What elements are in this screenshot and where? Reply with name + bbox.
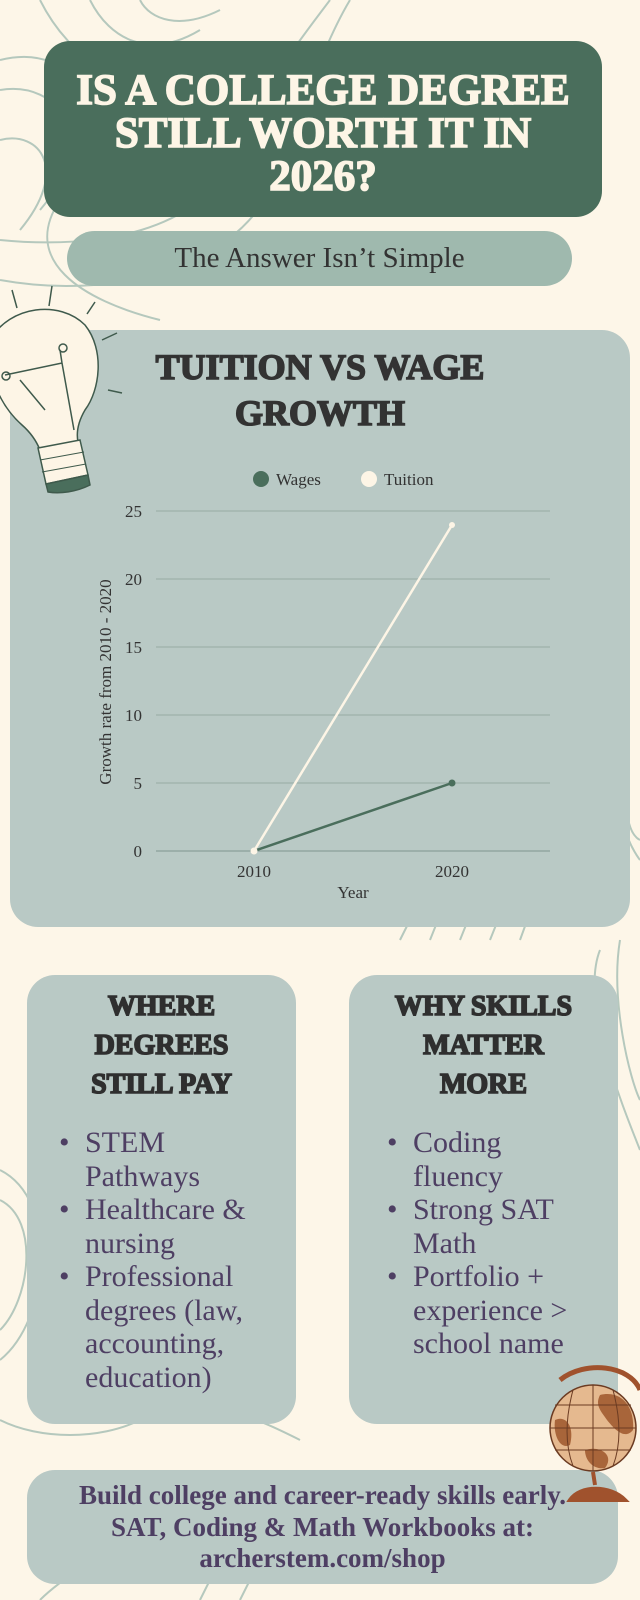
callout: shop: SAT, Coding & Math Workbooks at:	[111, 1512, 534, 1542]
bullet list: Professional	[85, 1260, 233, 1293]
bullet list: STEM	[85, 1126, 165, 1159]
bullet list	[388, 1126, 567, 1360]
line chart: Growth rate from 2010 - 2020	[96, 579, 115, 785]
icon: lightbulb	[0, 286, 122, 494]
chart heading: TUITION VS WAGE	[156, 347, 484, 387]
heading: WHERE	[108, 991, 215, 1022]
y tick labels: 10	[125, 706, 142, 725]
callout: shop: Build college and career-ready skills early.	[79, 1480, 566, 1510]
panel: why skills matter more	[349, 975, 618, 1424]
callout: shop	[27, 1470, 618, 1584]
tuition line	[254, 522, 455, 851]
bullet list: fluency	[413, 1160, 503, 1192]
title	[44, 41, 602, 217]
legend: Tuition	[384, 470, 434, 489]
panel: chart	[10, 330, 630, 927]
y tick labels: 20	[125, 570, 142, 589]
subtitle pill	[67, 231, 572, 286]
title: STILL WORTH IT IN	[115, 110, 531, 157]
bullet list: accounting,	[85, 1327, 224, 1360]
heading	[91, 991, 232, 1100]
bullet list: school name	[413, 1327, 564, 1360]
callout: shop: archerstem.com/shop	[199, 1543, 446, 1573]
y tick labels: 5	[134, 774, 142, 793]
line chart	[96, 470, 550, 902]
heading: STILL PAY	[91, 1069, 232, 1100]
bullet list: nursing	[85, 1226, 175, 1260]
heading: MORE	[440, 1069, 527, 1100]
bullet list: Strong SAT	[413, 1193, 554, 1226]
bullet list: Coding	[413, 1126, 501, 1159]
x tick labels: 2020	[435, 862, 469, 881]
legend	[253, 470, 434, 489]
y tick labels	[125, 502, 142, 861]
subtitle pill: The Answer Isn’t Simple	[174, 242, 465, 274]
y tick labels: 25	[125, 502, 142, 521]
y tick labels: 0	[134, 842, 142, 861]
legend: Wages	[276, 470, 321, 489]
bullet list	[60, 1126, 246, 1394]
bullet list: Pathways	[85, 1160, 200, 1192]
heading: WHY SKILLS	[395, 991, 572, 1022]
bullet list: degrees (law,	[85, 1294, 243, 1326]
chart heading	[155, 347, 484, 433]
title: 2026?	[269, 153, 377, 200]
x tick labels	[237, 862, 469, 881]
heading	[394, 991, 572, 1100]
axis titles: Year	[337, 883, 369, 902]
bullet list: Math	[413, 1226, 476, 1260]
x tick labels: 2010	[237, 862, 271, 881]
bullet list: Portfolio +	[413, 1260, 544, 1293]
bullet list: Healthcare &	[85, 1193, 246, 1226]
wages line	[250, 780, 456, 854]
panel: where degrees still pay	[27, 975, 296, 1424]
heading: MATTER	[423, 1030, 544, 1061]
y tick labels: 15	[125, 638, 142, 657]
chart heading: GROWTH	[235, 393, 405, 433]
heading: DEGREES	[95, 1030, 228, 1061]
icon: globe	[549, 1365, 640, 1502]
bullet list: experience >	[413, 1294, 567, 1326]
title: IS A COLLEGE DEGREE	[76, 67, 570, 114]
bullet list: education)	[85, 1360, 212, 1394]
